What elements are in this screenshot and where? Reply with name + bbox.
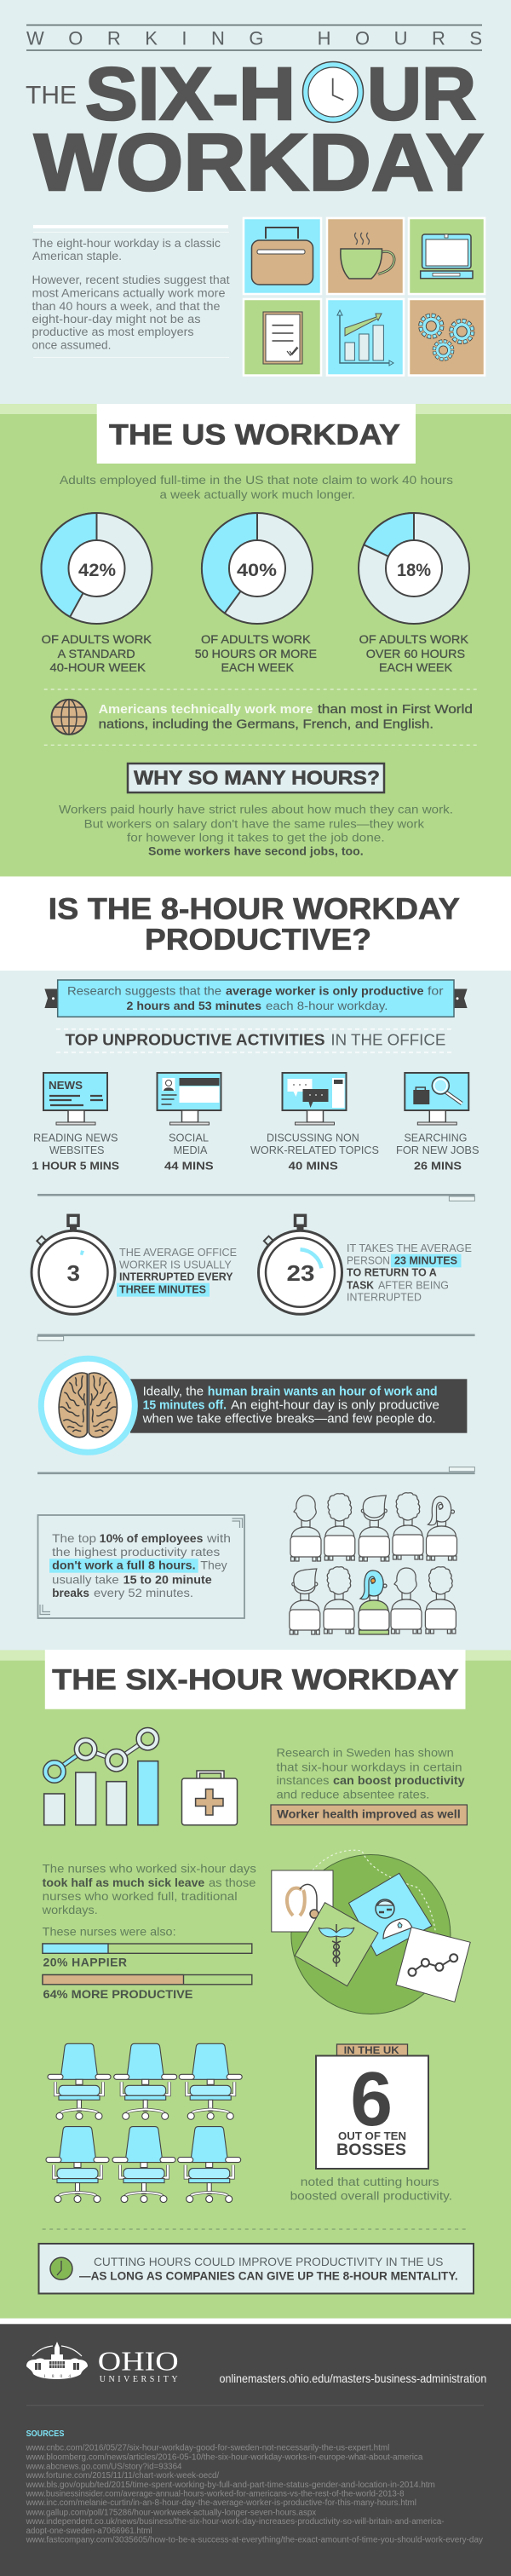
caption: reading news websites (32, 1131, 119, 1173)
caption: social media: SOCIAL (169, 1131, 209, 1144)
sources list: www.independent.co.uk/news/business/the-six-hour-work-day-increases-productivity-so-will-britain-and-america- (26, 2517, 445, 2527)
callout box: top 10% of employees: usually take (52, 1572, 119, 1586)
card: green caduceus (295, 1903, 378, 1986)
title: THE SIX-HOUR WORKDAY: THE (26, 82, 77, 110)
caption: searching for new jobs: SEARCHING (404, 1131, 467, 1144)
caption: reading news websites: 1 HOUR 5 MINS (32, 1160, 119, 1173)
background: pale blue page (0, 0, 511, 1651)
sources list: www.cnbc.com/2016/05/27/six-hour-workday-good-for-sweden-not-necessarily-the-us-expert.html (26, 2444, 389, 2453)
text: interrupted every three minutes: WORKER IS USUALLY (119, 1258, 232, 1271)
conclusion box: —AS LONG AS COMPANIES CAN GIVE UP THE 8-HOUR MENTALITY. (79, 2268, 458, 2282)
text: nurses took half as much sick leave: The nurses who worked six-hour days (43, 1861, 256, 1875)
icon tile: coffee cup (327, 218, 404, 294)
icon tile: laptop (409, 218, 485, 294)
card: white line chart (396, 1928, 470, 2002)
monitor icon: social media (157, 1073, 221, 1125)
sources heading: SOURCES (26, 2429, 64, 2439)
callout box: top 10% of employees: They (200, 1559, 227, 1572)
caption: searching for new jobs: FOR NEW JOBS (396, 1144, 479, 1156)
callout: Americans work more (99, 702, 473, 732)
stat card: 6 out of ten bosses in the UK: OUT OF TEN (338, 2129, 406, 2142)
intro text block: The eight-hour workday is a classic (32, 237, 221, 250)
ribbon banner: productive hours: average worker is only productive (226, 983, 424, 997)
header rule lines and kicker: WORKING HOURS: WORKING HOURS (26, 28, 482, 49)
intro text block: American staple. (32, 250, 122, 262)
sources list: www.inc.com/melanie-curtin/in-an-8-hour-day-the-average-worker-is-productive-for-this-many-hours.html (26, 2498, 416, 2508)
caption: social media (164, 1131, 214, 1173)
sources list: www.bloomberg.com/news/articles/2016-05-10/the-six-hour-workday-works-in-europe-what-about-america (26, 2452, 423, 2462)
callout: Americans work more: Americans technically work more (99, 702, 313, 717)
text: 23 minutes to return to a task: AFTER BEING (378, 1278, 449, 1291)
caption: 40%: 50 HOURS OR MORE (195, 648, 317, 660)
logo: Ohio University: OHIO (98, 2346, 179, 2377)
text: nurses took half as much sick leave: workdays. (42, 1903, 98, 1916)
logo: Ohio University: UNIVERSITY (100, 2375, 178, 2384)
callout box: top 10% of employees: the highest productivity rates (52, 1545, 220, 1559)
text: 23 minutes to return to a task: PERSON (347, 1253, 390, 1266)
callout box: top 10% of employees: 10% of employees (100, 1531, 204, 1545)
callout box: top 10% of employees: The top (52, 1531, 96, 1545)
stopwatch: 3: 3 (66, 1260, 80, 1286)
sources list: www.abcnews.go.com/US/story?id=93364 (26, 2462, 182, 2471)
panel: the six-hour workday background (0, 1651, 511, 2319)
intro text block: most Americans actually work more (32, 286, 225, 299)
text: research in Sweden: that six-hour workdays in certain (276, 1760, 462, 1773)
illustration: six office chairs (46, 2043, 242, 2203)
stat card: 6 out of ten bosses in the UK: IN THE UK (344, 2044, 399, 2056)
donut chart: 40% (202, 513, 313, 624)
text: 23 minutes to return to a task: INTERRUPTED (347, 1291, 422, 1304)
intro sentence: Adults employed full-time in the US that note claim to work 40 hours (60, 474, 453, 487)
caption: discussing non work-related topics: 40 MINS (289, 1160, 338, 1173)
text: nurses took half as much sick leave: nurses who worked full, traditional (43, 1889, 238, 1903)
sources list: www.fastcompany.com/3035605/how-to-be-a-success-at-everything/the-exact-amount-of-time-you-should-work-every-day (26, 2536, 483, 2545)
monitor icon: chat (283, 1073, 346, 1125)
title: THE SIX-HOUR WORKDAY: O (307, 53, 365, 135)
text: nurses took half as much sick leave (42, 1861, 256, 1939)
stopwatch: 23 (259, 1215, 342, 1314)
sources list (26, 2444, 483, 2545)
logo: Ohio University (26, 2342, 179, 2384)
icon tile: checklist document (244, 299, 321, 375)
sources list: www.gallup.com/poll/175286/hour-workweek-actually-longer-seven-hours.aspx (26, 2508, 316, 2517)
stat card: 6 out of ten bosses in the UK (316, 2044, 428, 2169)
stat card: 6 out of ten bosses in the UK: BOSSES (336, 2141, 406, 2159)
text: interrupted every three minutes: INTERRUPTED EVERY (119, 1271, 233, 1283)
illustration: ten employees seen from behind (290, 1493, 456, 1634)
text: cutting hours boosted productivity: boosted overall productivity. (290, 2189, 452, 2203)
text: nurses took half as much sick leave: took half as much sick leave (43, 1876, 205, 1889)
caption: searching for new jobs: 26 MINS (414, 1160, 462, 1173)
text: why so many hours explanation (59, 804, 453, 858)
card: cyan doctor (349, 1873, 432, 1956)
sources list: www.fortune.com/2015/11/11/chart-work-week-oecd/ (26, 2471, 219, 2481)
donut chart: 18% (359, 513, 469, 624)
caption: 40% (195, 633, 317, 674)
caption: social media: 44 MINS (164, 1160, 214, 1173)
icon: small clock (50, 2257, 72, 2279)
text: why so many hours explanation: But workers on salary don't have the same rules—they work (84, 817, 424, 830)
heading: WHY SO MANY HOURS? (128, 764, 384, 792)
icon: medical kit (182, 1771, 237, 1825)
caption: 18%: OF ADULTS WORK (359, 633, 468, 646)
heading: THE SIX-HOUR WORKDAY (45, 1650, 466, 1709)
donut chart: 40%: 40% (237, 561, 277, 580)
ribbon banner: productive hours: 2 hours and 53 minutes (126, 999, 261, 1012)
text: research in Sweden: can boost productivity (333, 1773, 465, 1787)
dark callout box: human brain breaks: An eight-hour day is only productive (231, 1398, 439, 1412)
caption: reading news websites: READING NEWS (33, 1131, 118, 1144)
text: why so many hours explanation: Some workers have second jobs, too. (148, 845, 364, 858)
conclusion box: CUTTING HOURS COULD IMPROVE PRODUCTIVITY IN THE US (94, 2255, 443, 2268)
intro sentence: a week actually work much longer. (160, 488, 355, 501)
stopwatch: 3 (32, 1215, 115, 1314)
ribbon banner: productive hours: for (428, 983, 444, 997)
logo: Ohio University: 1804 (43, 2374, 71, 2379)
caption: 40%: OF ADULTS WORK (201, 633, 311, 646)
intro text block: once assumed. (32, 338, 111, 351)
caption: discussing non work-related topics: WORK-RELATED TOPICS (250, 1144, 379, 1156)
text: 23 minutes to return to a task: TO RETURN TO A (347, 1265, 437, 1278)
intro text block: However, recent studies suggest that (32, 274, 230, 286)
dark callout box: human brain breaks: when we take effective breaks—and few people do. (142, 1412, 436, 1426)
monitor icon: job search (405, 1073, 468, 1125)
text: nurses took half as much sick leave: These nurses were also: (43, 1925, 176, 1939)
title: THE SIX-HOUR WORKDAY (26, 53, 484, 208)
text: why so many hours explanation: Workers paid hourly have strict rules about how much they can work. (59, 804, 453, 816)
text: 23 minutes to return to a task (347, 1242, 472, 1304)
callout: Americans work more: nations, including the Germans, French, and English. (99, 717, 433, 732)
caption: 18% (359, 633, 468, 674)
text: 23 minutes to return to a task: IT TAKES THE AVERAGE (347, 1242, 472, 1254)
caption: social media: MEDIA (174, 1144, 208, 1156)
icon: brain in circle (41, 1358, 135, 1452)
sources list: www.businessinsider.com/average-annual-hours-worked-for-americans-vs-the-rest-of-the-world-2013-8 (26, 2490, 405, 2499)
icon tile: briefcase (244, 218, 321, 294)
callout box: top 10% of employees: breaks (52, 1586, 89, 1599)
text: cutting hours boosted productivity: noted that cutting hours (301, 2175, 439, 2188)
panel: footer background (0, 2324, 511, 2576)
stopwatch: 23: 23 (286, 1260, 315, 1286)
text: research in Sweden: and reduce absentee rates. (276, 1788, 429, 1801)
intro text block (32, 225, 230, 358)
text: cutting hours boosted productivity (290, 2175, 452, 2203)
text: research in Sweden: instances (276, 1773, 329, 1787)
white gap before footer (0, 2319, 511, 2325)
icon tile: rising bar chart (327, 299, 404, 375)
conclusion box (39, 2244, 474, 2294)
text: interrupted every three minutes: THREE MINUTES (119, 1283, 206, 1296)
subheading: top unproductive activities: IN THE OFFICE (330, 1032, 445, 1049)
stat card: 6 out of ten bosses in the UK: 6 (350, 2057, 393, 2142)
caption: 40%: EACH WEEK (221, 661, 294, 674)
callout box: top 10% of employees: every 52 minutes. (94, 1586, 193, 1599)
ribbon banner: productive hours: each 8-hour workday. (266, 999, 388, 1012)
progress bar: 64% more productive (43, 1975, 252, 2001)
title: THE SIX-HOUR WORKDAY: WORKDAY (34, 118, 484, 208)
subheading: top unproductive activities (65, 1032, 445, 1049)
heading: IS THE 8-HOUR WORKDAY PRODUCTIVE? (49, 892, 460, 956)
monitor icon: news (43, 1073, 107, 1125)
dark callout box: human brain breaks: 15 minutes off. (143, 1398, 227, 1412)
caption: 18%: EACH WEEK (379, 661, 452, 674)
footer url: onlinemasters.ohio.edu/masters-business-administration (220, 2371, 486, 2385)
intro sentence (60, 474, 453, 501)
ribbon banner: productive hours: Research suggests that the (67, 983, 221, 997)
text: research in Sweden: Research in Sweden has shown (276, 1746, 454, 1760)
title: THE SIX-HOUR WORKDAY: UR (367, 53, 476, 135)
dark callout box: human brain breaks (130, 1379, 467, 1433)
callout: worker health improved (271, 1805, 467, 1825)
ribbon banner: productive hours (44, 980, 468, 1017)
card: stethoscope (272, 1870, 333, 1932)
callout box: top 10% of employees (37, 1515, 244, 1618)
text: research in Sweden (276, 1746, 465, 1801)
caption: 42% (42, 633, 152, 674)
sources list: www.bls.gov/opub/ted/2015/time-spent-working-by-full-and-part-time-status-gender-and-location-in-2014.htm (26, 2481, 435, 2490)
heading: IS THE 8-HOUR WORKDAY PRODUCTIVE?: PRODUCTIVE? (145, 923, 371, 956)
text: why so many hours explanation: for however long it takes to get the job done. (127, 832, 385, 844)
text: interrupted every three minutes (117, 1246, 237, 1297)
callout: worker health improved: Worker health improved as well (277, 1807, 461, 1820)
icon: globe (51, 700, 87, 735)
intro text block: than 40 hours a week, and that the (32, 300, 220, 313)
panel: the US workday background (0, 404, 511, 876)
icon: clock replacing O (301, 61, 365, 124)
illustration: healthcare cards on green circle (272, 1850, 470, 2014)
progress bar: 20% happier: 20% HAPPIER (43, 1956, 127, 1969)
bar and line chart icon (44, 1730, 158, 1825)
dark callout box: human brain breaks: human brain wants an hour of work and (208, 1385, 438, 1398)
caption: discussing non work-related topics (250, 1131, 379, 1173)
text: interrupted every three minutes: THE AVERAGE OFFICE (119, 1246, 237, 1259)
callout box: top 10% of employees: with (206, 1531, 231, 1545)
text: 23 minutes to return to a task: 23 MINUTES (394, 1253, 457, 1266)
text: nurses took half as much sick leave: as those (209, 1876, 256, 1889)
title: THE SIX-HOUR WORKDAY: SIX-H (85, 53, 296, 135)
icon tile: gears (409, 299, 485, 375)
intro text block: eight-hour-day might not be as (32, 313, 201, 326)
highlighted employee with cyan hair (359, 1570, 389, 1634)
caption: 42%: A STANDARD (58, 648, 135, 660)
caption: 42%: OF ADULTS WORK (42, 633, 152, 646)
heading: THE US WORKDAY (97, 404, 416, 464)
donut chart: 42% (41, 513, 152, 624)
panel: productive heading band (0, 876, 511, 971)
subheading: top unproductive activities: TOP UNPRODUCTIVE ACTIVITIES (65, 1032, 325, 1049)
progress bar: 64% more productive: 64% MORE PRODUCTIVE (43, 1987, 192, 2001)
callout box: top 10% of employees: don't work a full 8 hours. (52, 1559, 196, 1572)
caption: searching for new jobs (396, 1131, 479, 1173)
heading: IS THE 8-HOUR WORKDAY PRODUCTIVE?: IS THE 8-HOUR WORKDAY (49, 892, 460, 925)
heading: WHY SO MANY HOURS?: WHY SO MANY HOURS? (134, 767, 380, 789)
text: 23 minutes to return to a task: TASK (347, 1278, 375, 1291)
caption: reading news websites: WEBSITES (49, 1144, 105, 1156)
caption: 42%: 40-HOUR WEEK (49, 661, 146, 674)
progress bar: 20% happier (43, 1944, 252, 1969)
monitor icon: news: NEWS (49, 1080, 83, 1092)
callout box: top 10% of employees: 15 to 20 minute (123, 1572, 212, 1586)
donut chart: 18%: 18% (397, 561, 431, 580)
caption: 18%: OVER 60 HOURS (366, 648, 465, 660)
heading: THE SIX-HOUR WORKDAY: THE SIX-HOUR WORKDAY (52, 1664, 459, 1697)
callout: Americans work more: than most in First World (318, 702, 473, 717)
dark callout box: human brain breaks: Ideally, the (143, 1385, 204, 1398)
caption: discussing non work-related topics: DISCUSSING NON (267, 1131, 359, 1144)
sources list: adopt-one-sweden-a7066961.html (26, 2527, 152, 2536)
intro text block: productive as most employers (32, 326, 194, 338)
donut chart: 42%: 42% (78, 561, 116, 580)
heading: THE US WORKDAY: THE US WORKDAY (109, 418, 400, 451)
